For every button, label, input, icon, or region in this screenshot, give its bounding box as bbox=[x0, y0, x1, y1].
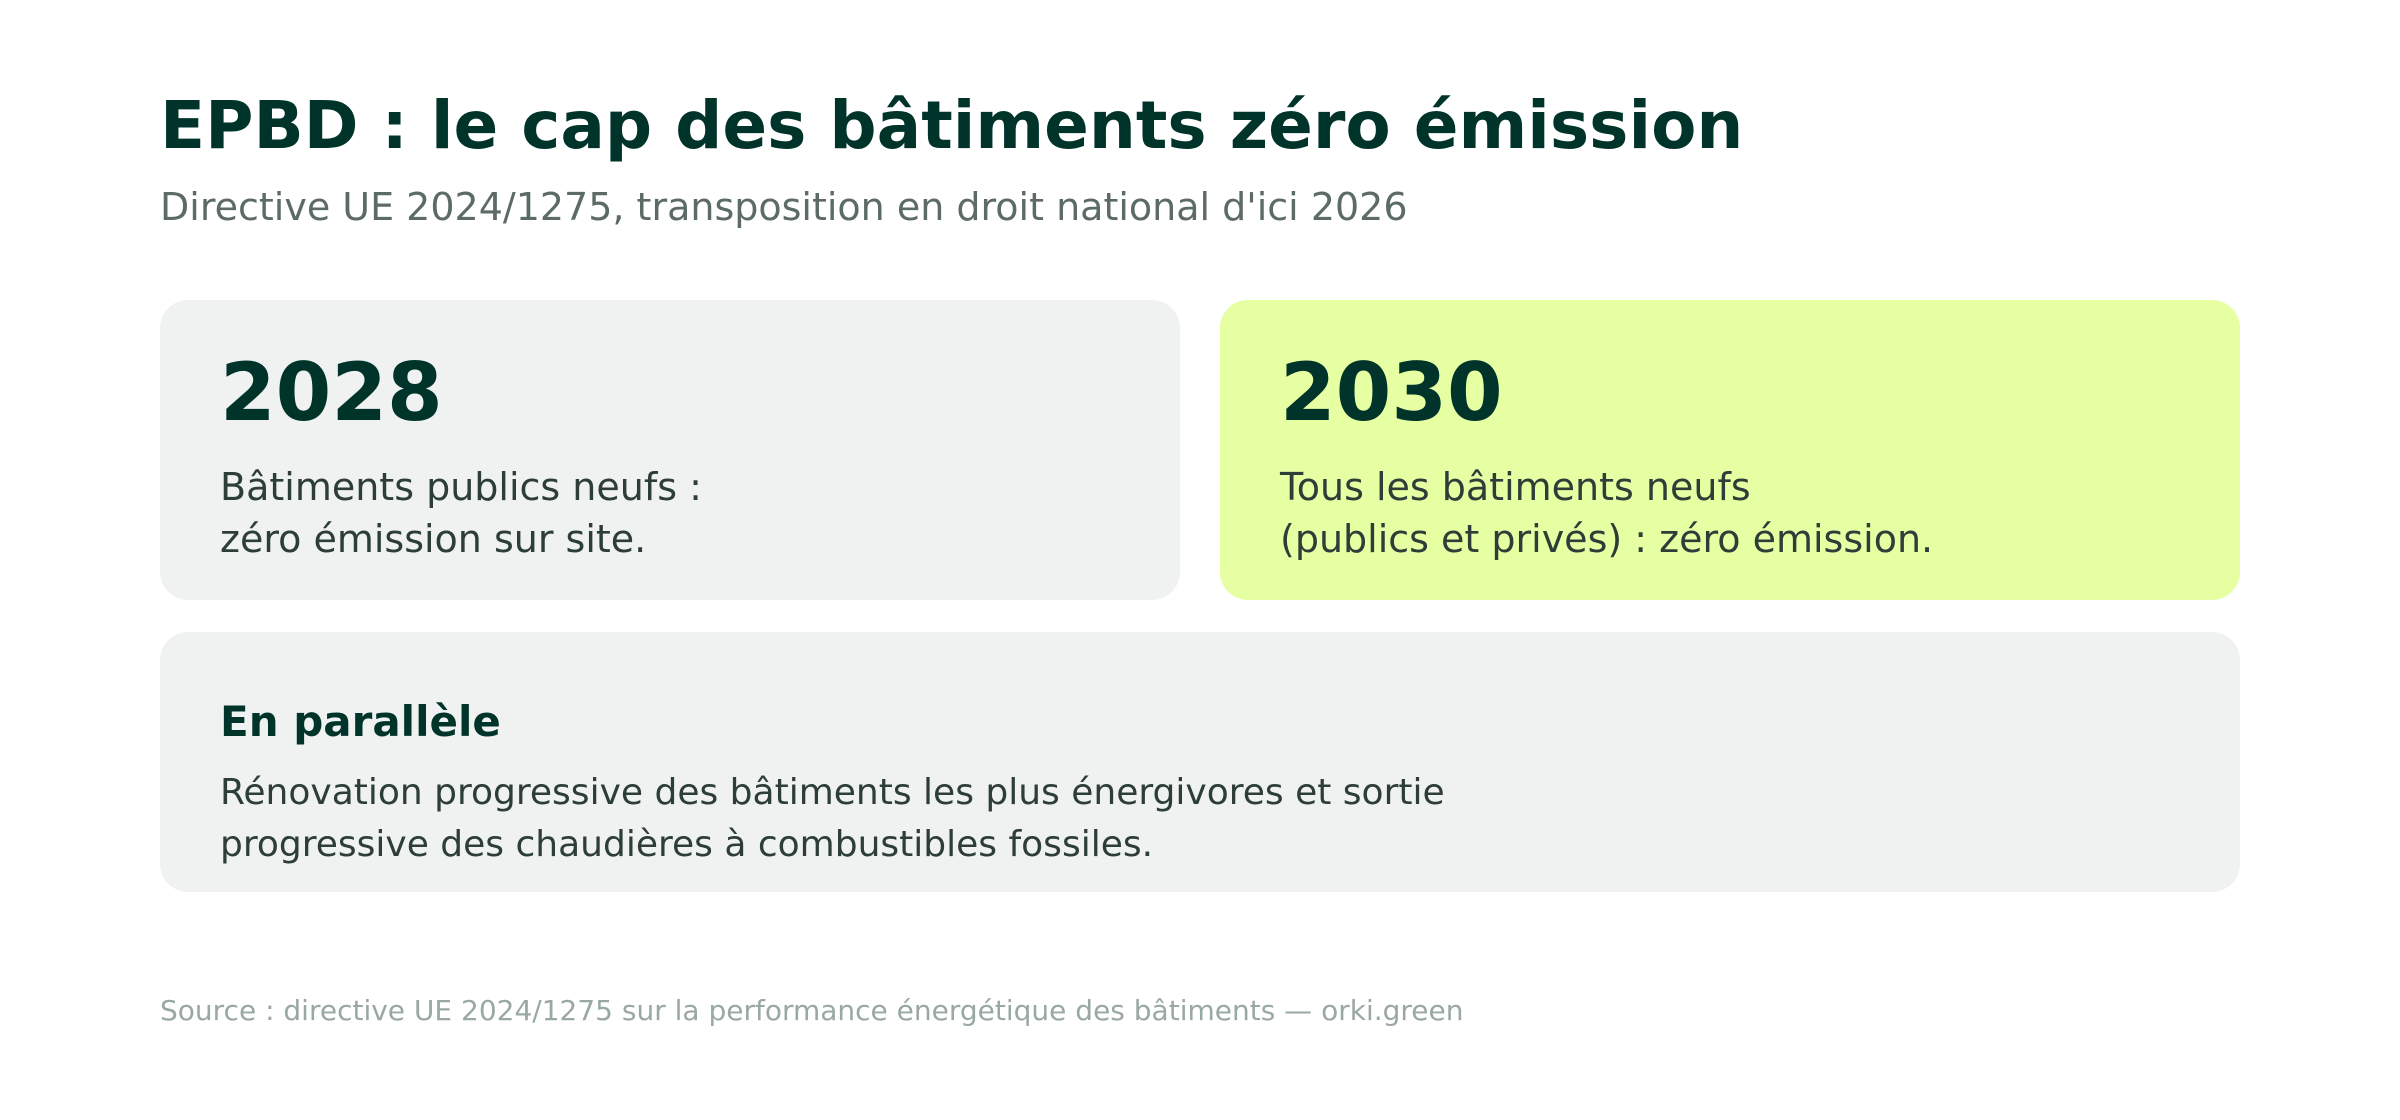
text: 2030 description: Tous les bâtiments neufs bbox=[1279, 465, 1751, 509]
text: 2028 description: Bâtiments publics neufs : bbox=[220, 465, 702, 509]
subtitle: Directive UE 2024/1275, transposition en droit national d'ici 2026 bbox=[160, 185, 1408, 229]
text: 2030 description: (publics et privés) : zéro émission. bbox=[1280, 517, 1933, 561]
panel: en parallèle bbox=[160, 632, 2240, 892]
heading: en parallèle: En parallèle bbox=[220, 697, 501, 746]
text: en parallèle description: Rénovation progressive des bâtiments les plus énergivores et sortie bbox=[220, 772, 1445, 813]
year: 2030: 2030 bbox=[1280, 346, 1503, 439]
title: EPBD : le cap des bâtiments zéro émission bbox=[160, 87, 1743, 164]
text: 2028 description: zéro émission sur site. bbox=[220, 517, 646, 561]
panel: 2028 bbox=[160, 300, 1180, 600]
source: Source : directive UE 2024/1275 sur la performance énergétique des bâtiments — orki.green bbox=[160, 994, 1464, 1027]
text: en parallèle description: progressive des chaudières à combustibles fossiles. bbox=[220, 824, 1153, 865]
year: 2028: 2028 bbox=[220, 346, 443, 439]
panel: 2030 bbox=[1220, 300, 2240, 600]
